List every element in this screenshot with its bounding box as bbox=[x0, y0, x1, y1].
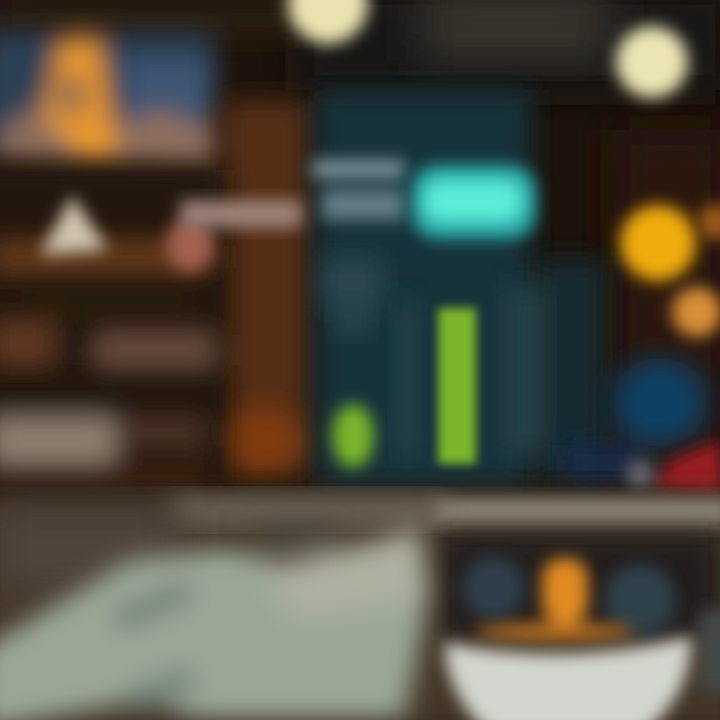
green tall bar bbox=[438, 308, 476, 464]
yellow orb bbox=[620, 205, 696, 281]
dark fruit left bbox=[462, 556, 526, 620]
white mound on shelf bbox=[40, 195, 108, 255]
red vase on shelf bbox=[166, 219, 214, 271]
blue object bbox=[565, 358, 708, 480]
dark fruit right bbox=[604, 564, 676, 636]
red object bbox=[628, 440, 720, 495]
bowl of fruit bbox=[444, 556, 692, 720]
green short bar bbox=[332, 404, 374, 468]
ceiling light right bbox=[616, 26, 688, 98]
orange fruit bbox=[475, 558, 635, 641]
wood panel bbox=[216, 100, 310, 475]
teal board bbox=[316, 90, 605, 488]
newspaper bbox=[0, 525, 430, 720]
heading blur gray bbox=[312, 160, 404, 220]
pink label bar bbox=[180, 200, 302, 228]
cyan highlight bbox=[412, 165, 536, 239]
orange orb bbox=[672, 204, 720, 337]
bowl body bbox=[444, 636, 692, 720]
ceiling light left bbox=[288, 0, 368, 44]
poster top left bbox=[0, 32, 218, 168]
table surface bbox=[0, 495, 720, 720]
shelves left bbox=[0, 170, 225, 485]
